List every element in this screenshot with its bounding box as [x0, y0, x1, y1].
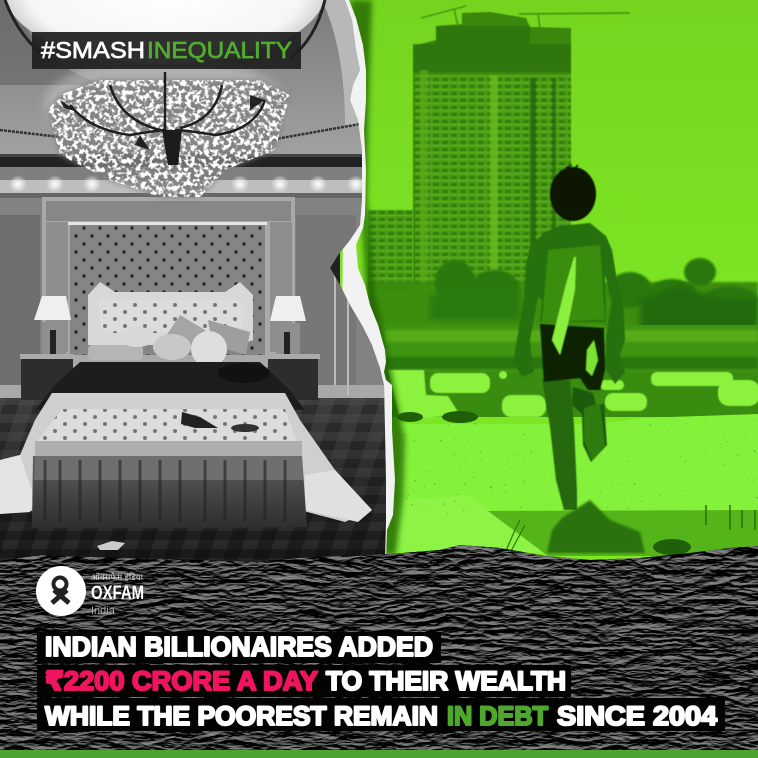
- headline line 3: IN DEBT: [447, 701, 548, 731]
- foam bank: [395, 414, 758, 553]
- headline: [37, 631, 725, 731]
- shoes on floor: [97, 541, 125, 550]
- headline line 3: [37, 698, 725, 731]
- lamps: [34, 296, 306, 359]
- logo: Oxfam India: OXFAM: [91, 583, 144, 604]
- ceiling: [0, 0, 362, 150]
- headboard: [42, 197, 295, 367]
- floor: [0, 398, 390, 563]
- tree line and far bank: [368, 258, 758, 417]
- hashtag banner: INEQUALITY: [147, 37, 292, 63]
- green footer bar: [0, 750, 758, 758]
- headline line 2: [37, 665, 571, 697]
- panel: black and white luxury bedroom photo: [0, 0, 390, 563]
- shallow water: [488, 505, 758, 556]
- icon: Oxfam figure: [36, 566, 86, 616]
- bench: [32, 409, 307, 528]
- torn paper shadow: [350, 0, 405, 555]
- high-rise tower: [413, 6, 630, 285]
- low building: [368, 210, 413, 290]
- hashtag banner: [32, 32, 301, 69]
- logo: Oxfam India: [36, 566, 144, 617]
- dark throw: [35, 362, 305, 410]
- logo: Oxfam India: ऑक्सफैम इंडिया: [91, 572, 144, 582]
- duvet: [0, 393, 372, 522]
- foam blobs on water: [388, 370, 758, 420]
- logo: Oxfam India: India: [91, 605, 116, 617]
- headline line 3: WHILE THE POOREST REMAIN: [45, 701, 438, 731]
- dark rock texture band: [0, 545, 758, 758]
- boy walking: [514, 165, 645, 553]
- dark shoreline clumps: [397, 411, 478, 423]
- headline line 3: SINCE 2004: [557, 701, 717, 731]
- nightstands: [20, 354, 320, 400]
- pillows: [88, 315, 250, 367]
- torn paper edge: [340, 0, 395, 560]
- wall panels: [0, 198, 390, 403]
- headline line 2: ₹2200 CRORE A DAY: [45, 666, 318, 696]
- hashtag banner: #SMASH: [41, 37, 145, 63]
- cushion: [218, 363, 270, 383]
- headline line 2: TO THEIR WEALTH: [326, 666, 566, 696]
- foam specks: [395, 420, 758, 515]
- cornice: [0, 150, 390, 198]
- chandelier: [48, 72, 290, 197]
- headline line 1: INDIAN BILLIONAIRES ADDED: [45, 631, 433, 662]
- panel: green photo of boy in polluted river: [340, 0, 758, 560]
